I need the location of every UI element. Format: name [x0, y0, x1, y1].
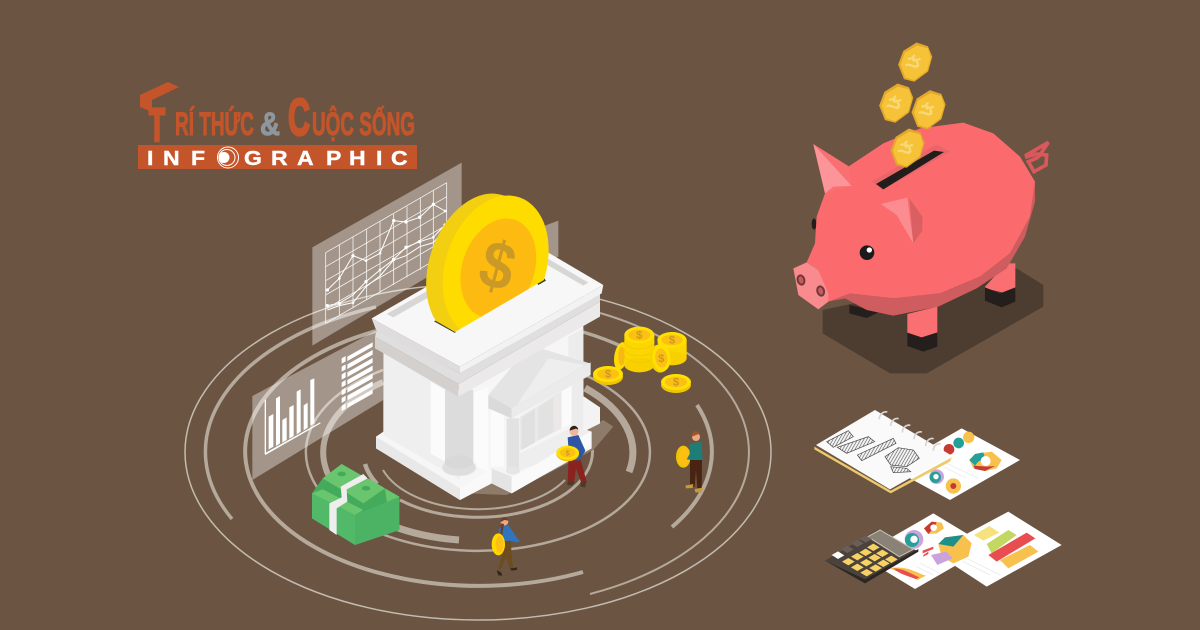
pig tail — [1025, 142, 1048, 172]
portico — [488, 345, 591, 480]
person with coin near bank: $ — [566, 448, 570, 457]
gold coin pile: $ — [605, 369, 612, 381]
logo roof mark — [140, 82, 179, 112]
gold coin pile: $ — [673, 377, 680, 389]
big gold coin — [426, 194, 549, 332]
panel: line chart — [312, 163, 558, 346]
person with coin on right — [676, 431, 703, 492]
person with coin near bank — [556, 426, 587, 487]
pig snout — [793, 262, 828, 309]
logo big T: T — [149, 99, 165, 151]
pie chart sheet — [860, 513, 988, 589]
report sheet — [892, 428, 1020, 500]
gold coin pile: $ — [658, 353, 665, 365]
falling coins — [875, 39, 949, 171]
notebook and report sheet — [814, 410, 1020, 500]
dollar sign: $ — [472, 226, 523, 306]
pig body — [828, 182, 1035, 316]
building base — [376, 395, 600, 500]
logo text: Tri Thức: RÍ THỨC — [175, 106, 254, 142]
infographic banner: GRAPHIC — [244, 146, 408, 170]
green cash stack — [312, 464, 399, 545]
gold coin pile: $ — [669, 335, 676, 347]
building roof slab — [372, 234, 603, 397]
pig eye — [860, 245, 874, 260]
calculator — [825, 529, 918, 583]
notebook — [814, 410, 952, 493]
person walking with coin — [492, 517, 520, 576]
building shadow — [467, 420, 613, 495]
gold coin pile — [593, 327, 691, 393]
right ear — [881, 198, 922, 243]
gold coin pile: $ — [636, 330, 643, 342]
coin slot — [872, 144, 950, 190]
back legs — [849, 263, 1015, 318]
logo ampersand: & — [260, 106, 280, 142]
big column — [442, 390, 476, 476]
building walls — [383, 323, 583, 482]
piggy bank — [793, 39, 1048, 373]
calculator and chart sheets — [825, 512, 1062, 589]
bar chart sheet — [933, 512, 1062, 587]
pig shadow — [823, 268, 1043, 373]
front leg — [907, 307, 937, 352]
logo — [138, 82, 417, 170]
bank building — [372, 179, 613, 500]
infographic canvas — [138, 42, 1062, 621]
concentric rings — [185, 284, 771, 620]
left ear — [813, 144, 852, 193]
coin slot — [434, 275, 546, 333]
panel: bar chart and list — [252, 327, 383, 480]
infographic banner: INF — [147, 146, 205, 170]
far eye — [812, 218, 816, 230]
logo big C: C — [288, 89, 310, 147]
logo text: Cuộc Sống: UỘC SỐNG — [312, 106, 415, 142]
infographic banner — [138, 145, 417, 170]
